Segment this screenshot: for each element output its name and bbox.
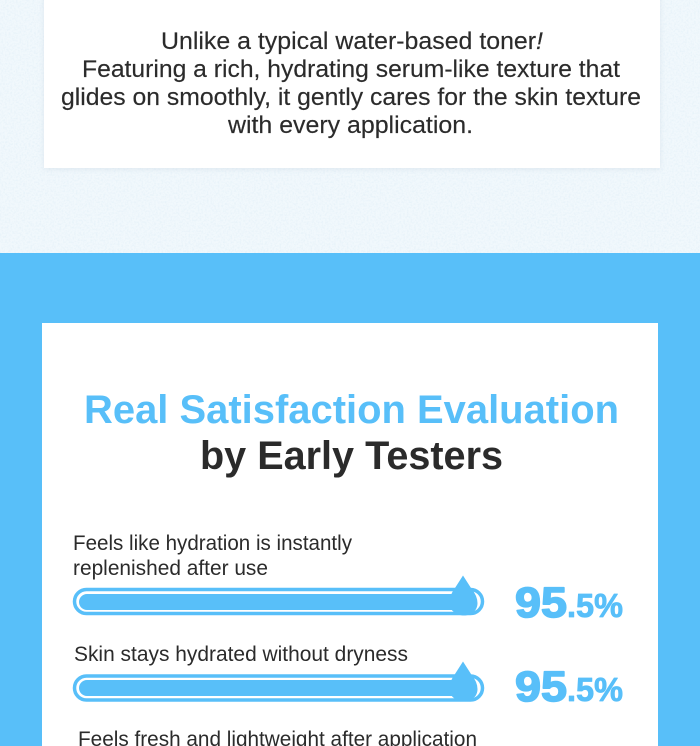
heading [84,388,619,478]
value: .5% [567,671,623,708]
metric: stays hydrated [74,643,623,711]
label: Feels like hydration is instantly [73,532,352,555]
value: 95 [515,579,567,627]
label: replenished after use [73,557,268,580]
value [515,579,623,627]
label: Skin stays hydrated without dryness [74,643,408,666]
icon: water drop [450,576,478,616]
text block: description: Featuring a rich, hydrating serum-like texture that [82,56,620,83]
text block: description: glides on smoothly, it gently cares for the skin texture [61,84,641,111]
text block: description: Unlike a typical water-based toner ! [161,28,543,55]
value: .5% [567,587,623,624]
icon: water drop [450,662,478,702]
progress bar [74,590,482,614]
progress bar [74,676,482,700]
metric: instant hydration [73,532,623,627]
heading: Real Satisfaction Evaluation [84,388,619,432]
panel: blue section background [0,253,700,746]
panel: toner description [44,0,660,168]
label [73,532,352,580]
panel: satisfaction evaluation card [42,323,658,746]
textured background [0,0,700,253]
text block: description [61,28,641,139]
value: 95 [515,663,567,711]
value [515,663,623,711]
text block: description: with every application. [227,112,473,139]
heading: by Early Testers [200,434,503,478]
